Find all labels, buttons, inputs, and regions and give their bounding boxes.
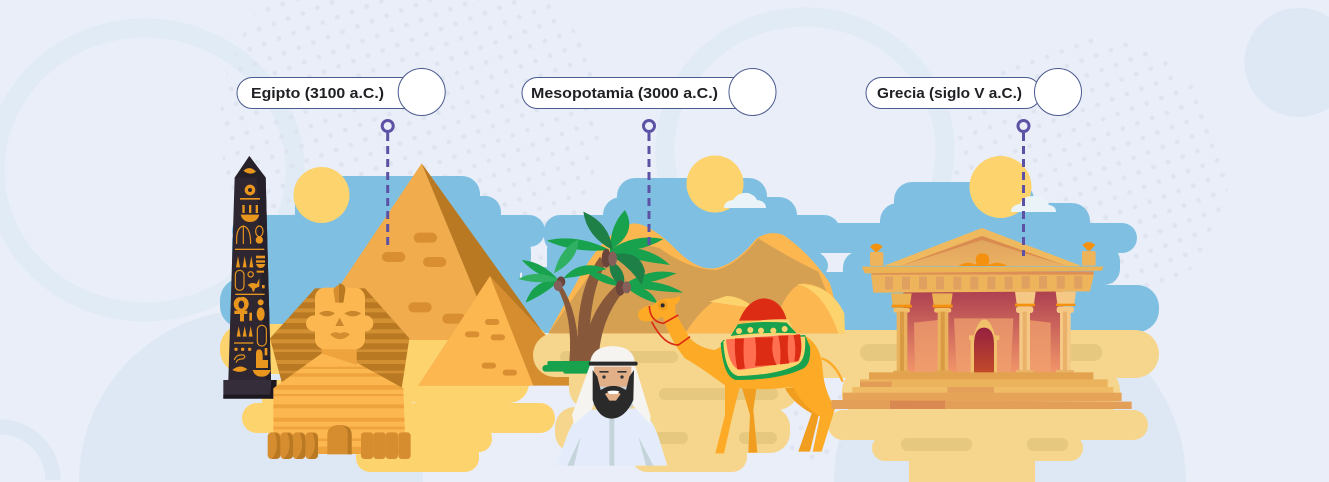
badge circle: Grecia [1034,68,1082,116]
label: Egipto [237,68,445,246]
palm leaves [522,210,683,303]
camel saddle [721,298,810,380]
heading: Mesopotamia: Mesopotamia (3000 a.C.) [531,85,718,102]
sphinx headdress [267,288,413,388]
connector: Egipto [382,120,393,246]
heading: Grecia: Grecia (siglo V a.C.) [877,85,1022,102]
label: Grecia [866,68,1082,256]
temple entablature [862,267,1104,293]
scene: Egipto [220,156,593,472]
dunes, palms, camel and man [518,210,845,466]
temple door [969,319,999,373]
palm trunks [557,257,623,362]
badge circle: Egipto [398,68,445,116]
gap in the sky [820,253,852,272]
Egypt sand [220,324,555,472]
pill: Mesopotamia [522,78,757,108]
badge circle: Mesopotamia [729,68,776,116]
temple columns [891,292,1076,373]
heading: Egipto: Egipto (3100 a.C.) [251,85,384,102]
man with keffiyeh [556,346,667,466]
grass [542,361,596,374]
Greece sky [790,182,1159,332]
dunes [548,223,845,333]
Egypt sky [220,176,550,328]
Egypt sun [294,167,350,223]
sky backdrop: Mesopotamia [522,156,880,333]
Mesopotamia sun [686,156,744,212]
small pyramid [418,276,593,386]
label: Mesopotamia [522,68,776,246]
temple wall panels [914,318,1051,373]
sphinx paws and door [268,425,411,459]
Greece sun [970,156,1032,218]
big pyramid [303,163,548,340]
sky backdrop: Grecia [790,156,1159,332]
connector: Mesopotamia [644,120,654,246]
temple pediment [883,228,1082,266]
pill: Egipto [237,78,427,108]
Greece cloud [1011,196,1056,212]
connector: Grecia [1018,120,1029,256]
sphinx [267,283,413,459]
sphinx face [306,283,373,349]
pill: Grecia [866,78,1041,108]
Mesopotamia sky [522,178,880,333]
temple roof ornaments [870,242,1096,266]
Mesopotamia cloud [724,193,766,208]
temple wall [903,290,1063,373]
sphinx body [270,348,410,454]
scene: Mesopotamia [518,210,1159,482]
temple steps [831,372,1132,409]
dates [554,249,631,296]
sand ripples [560,344,1102,451]
scene: Grecia temple [831,228,1132,409]
camel [638,296,843,453]
obelisk with hieroglyphs [223,156,277,399]
sand: Grecia and Mesopotamia [533,330,1159,482]
